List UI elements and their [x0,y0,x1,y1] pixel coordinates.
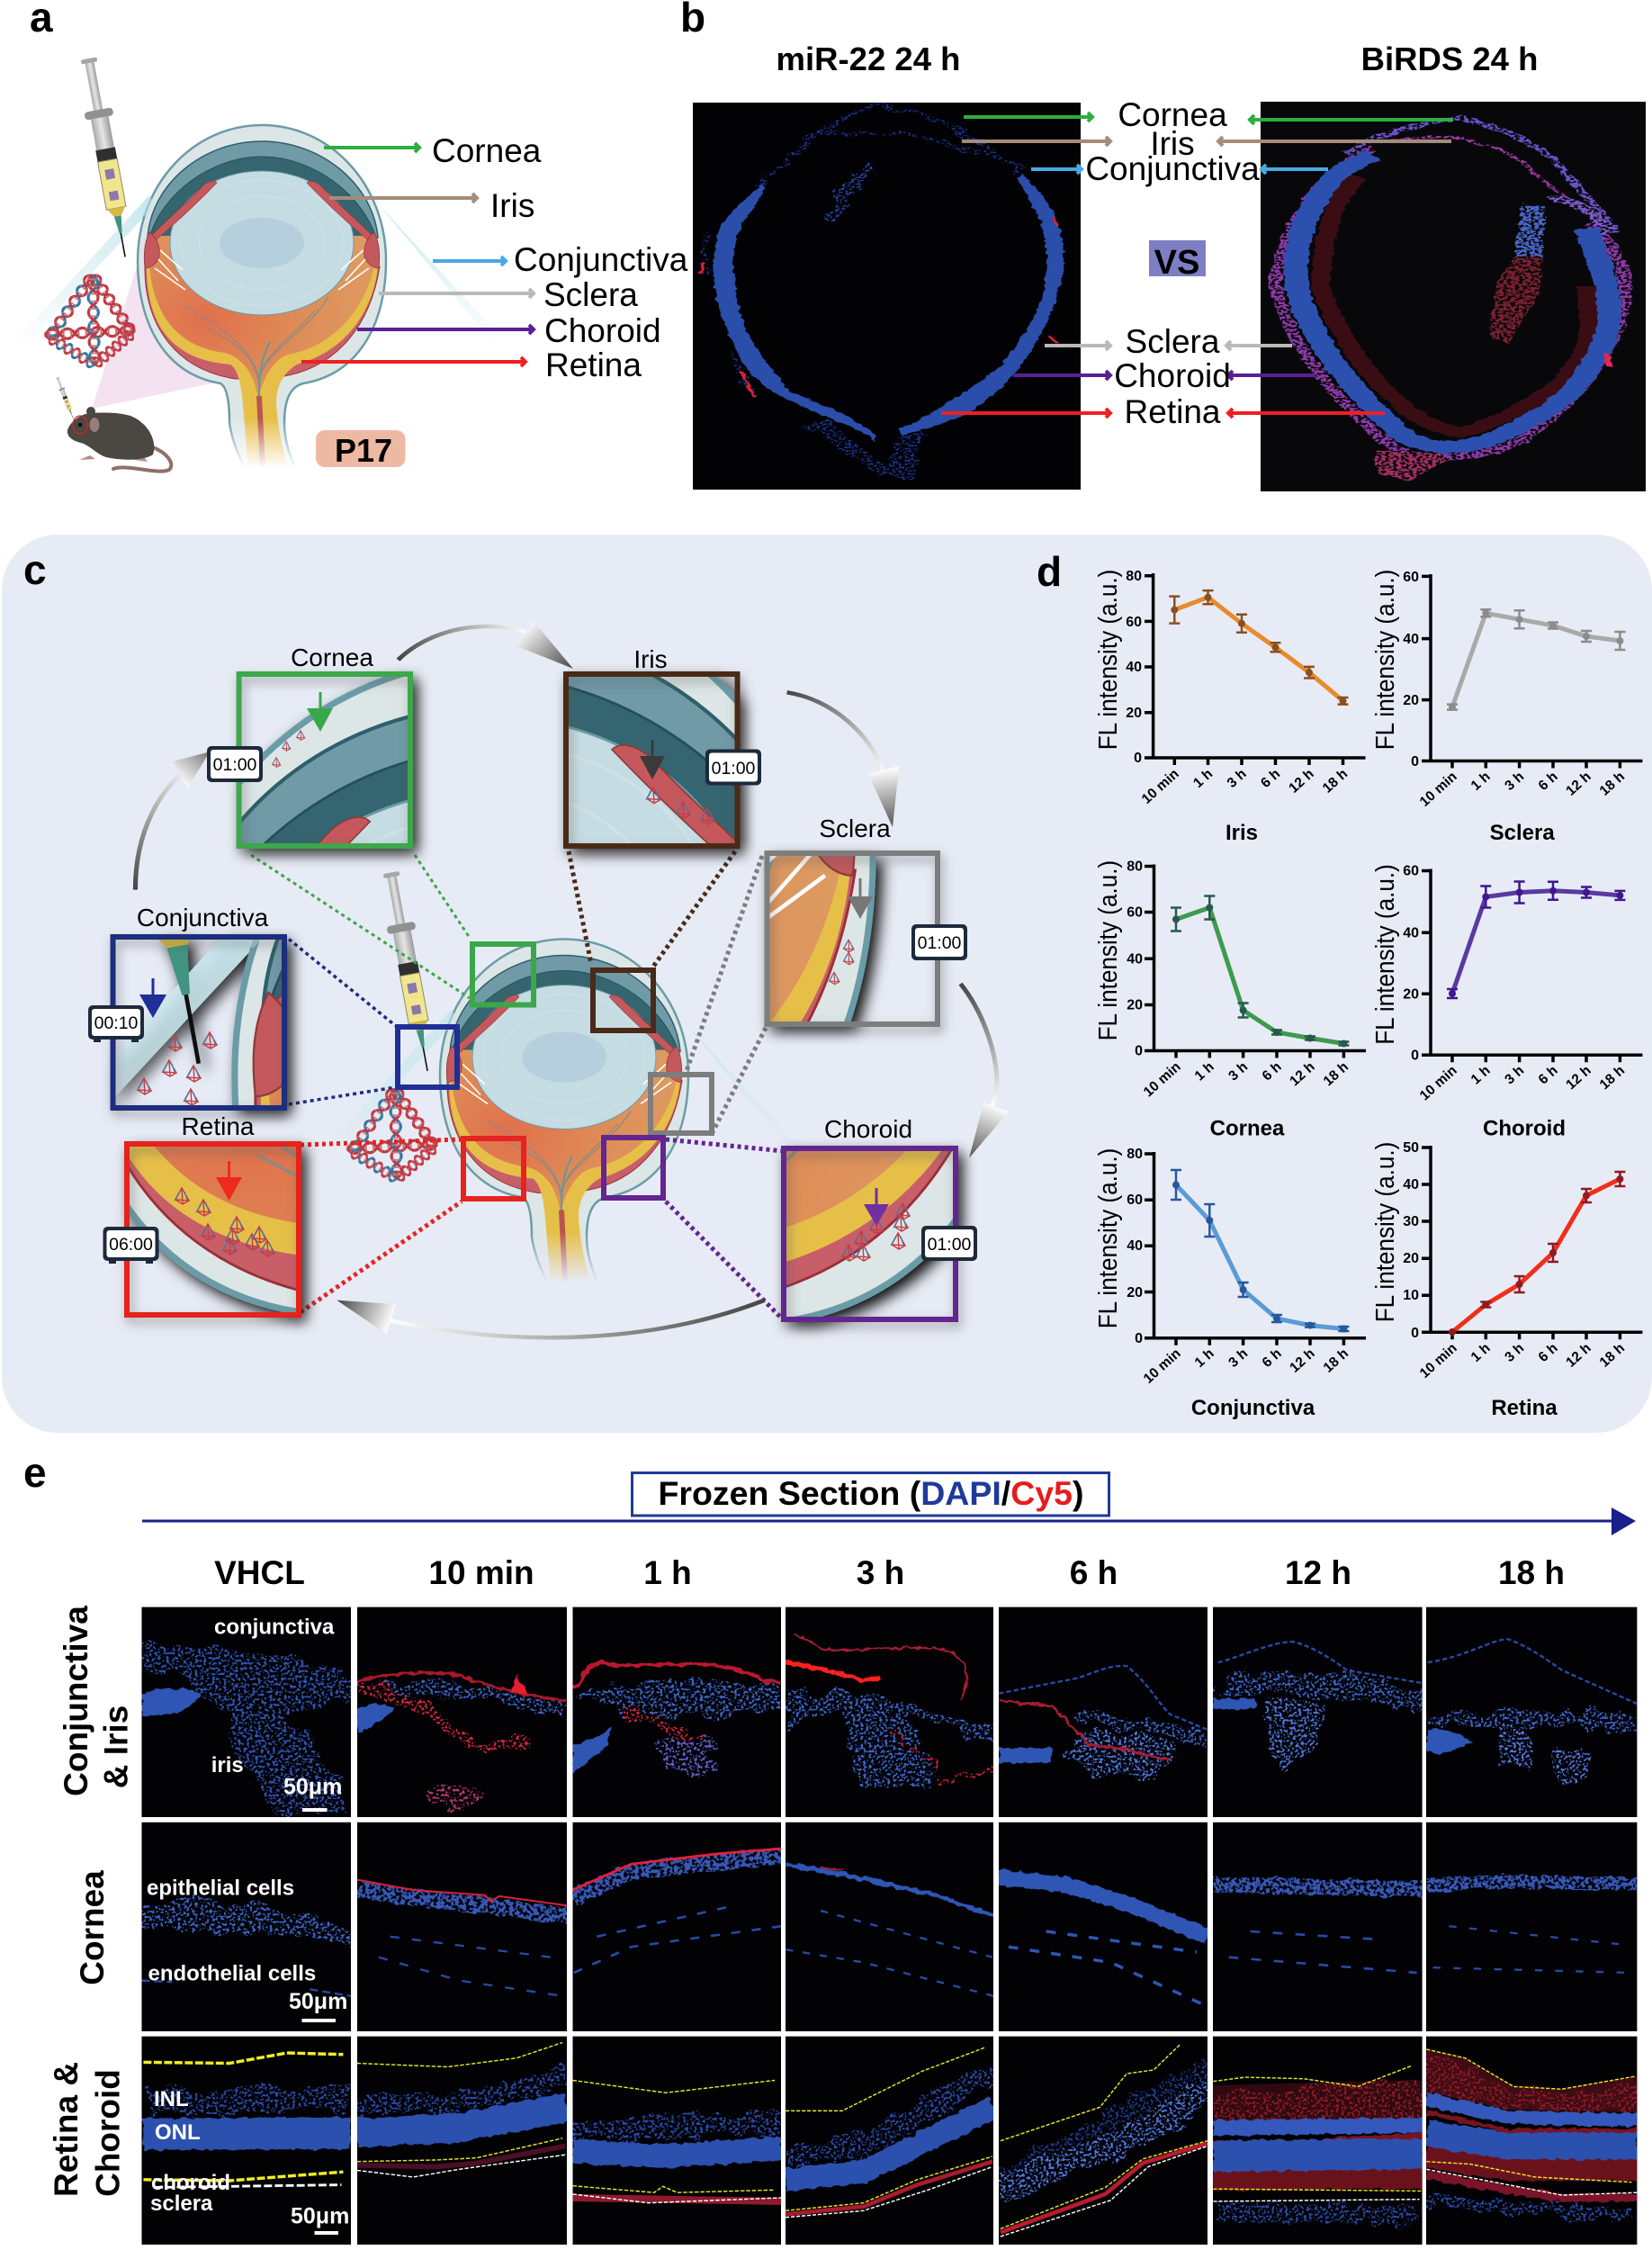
column headers: 1 h [643,1554,692,1591]
annotations row 1 [211,1615,342,1812]
chart: choroid: 12 h [1563,1063,1594,1093]
timeline arrow [142,1508,1636,1535]
chart: retina: Retina [1491,1396,1558,1420]
micrograph: cornea 3 h [786,1822,993,2032]
timer 06:00 retina [103,1227,158,1264]
inset: sclera: Sclera [819,814,891,842]
chart: conjunctiva: FL intensity (a.u.) [1093,1148,1122,1328]
chart: retina: 20 [1403,1251,1419,1266]
micrograph: miR-22 eye section [693,103,1082,490]
chart: retina [1370,1140,1642,1420]
inset: choroid: Choroid [824,1115,912,1143]
panel d: line charts [1037,548,1642,1420]
micrograph: cornea 10 min [357,1822,567,2032]
tissue labels between images: Retina [1125,393,1221,430]
micrograph: BiRDS eye section [1261,102,1646,491]
chart: iris: 80 [1126,569,1142,584]
chart: iris: 10 min [1139,766,1182,807]
chart: choroid: 0 [1411,1048,1419,1064]
chart: retina: 6 h [1536,1340,1561,1365]
chart: iris: 20 [1126,706,1142,721]
chart: conjunctiva: 40 [1127,1238,1143,1254]
micrograph: conjunctiva iris 3 h [786,1606,993,1818]
chart: iris: 3 h [1225,766,1250,791]
micrograph: retina choroid VHCL [141,2036,352,2245]
annotations row 3: 50μm [291,2204,349,2229]
timer 01:00 sclera [911,924,967,960]
column headers: 3 h [857,1554,904,1591]
chart: choroid: 40 [1403,925,1419,941]
VS badge: VS [1154,244,1199,282]
chart: retina: 30 [1403,1214,1419,1229]
micrograph: cornea 6 h [999,1822,1208,2032]
chart: iris: FL intensity (a.u.) [1093,570,1122,750]
annotations row 3: choroid [151,2171,230,2195]
column headers: VHCL [214,1554,305,1591]
inset: retina: Retina [182,1112,255,1140]
chart: conjunctiva: 60 [1127,1192,1143,1208]
timer 01:00 choroid: 01:00 [928,1235,972,1255]
micrograph: conjunctiva iris 1 h [572,1606,781,1818]
arrow: conjunctiva [433,256,506,266]
badge: P17 [316,430,405,469]
chart: retina: 40 [1403,1177,1419,1192]
tissue labels between images: Iris [1150,125,1195,162]
tissue labels between images: Sclera [1126,323,1220,360]
central eye with magnification squares [316,870,809,1282]
pink projection from mouse eye [92,264,220,409]
chart: conjunctiva: 20 [1127,1285,1143,1300]
magnification squares on eye [398,944,712,1199]
annotations row 1: conjunctiva [214,1615,335,1640]
column headers: 6 h [1070,1554,1118,1591]
chart: conjunctiva: 10 min [1141,1346,1184,1387]
chart: cornea [1093,859,1366,1141]
icon: mouse with injection [55,376,171,472]
tissue labels between images: Conjunctiva [1085,150,1260,187]
panel label c: c [23,546,47,593]
chart: conjunctiva: 18 h [1321,1346,1351,1376]
column headers: 18 h [1498,1554,1565,1591]
chart: choroid: 10 min [1417,1063,1460,1103]
inset: cornea: Cornea [291,644,373,671]
annotations row 2: 50μm [289,1989,347,2014]
chart: iris [1093,569,1366,845]
label: iris: Iris [490,187,534,224]
chart: cornea: 20 [1127,997,1143,1013]
chart: retina: 10 min [1417,1340,1460,1382]
comparison arrows for both images [941,112,1453,418]
chart: sclera: 3 h [1502,769,1527,794]
micrograph: retina choroid 3 h [786,2036,993,2245]
annotations row 2: endothelial cells [148,1962,316,1986]
chart: sclera: 60 [1403,570,1419,585]
chart: retina: FL intensity (a.u.) [1370,1142,1399,1322]
micrograph: cornea 18 h [1426,1822,1638,2032]
micrograph: retina choroid 12 h [1213,2036,1423,2245]
chart: choroid: Choroid [1483,1116,1566,1141]
chart: choroid: 3 h [1502,1063,1527,1087]
chart: cornea: 80 [1127,859,1143,875]
panel label d: d [1037,548,1062,595]
panel c: transport pathway [25,562,1609,1339]
chart: conjunctiva: 0 [1135,1331,1143,1346]
chart: retina: 1 h [1468,1340,1494,1365]
timer 06:00 retina: 06:00 [109,1235,153,1255]
dotted connector lines [251,851,784,1318]
chart: retina: 3 h [1502,1340,1527,1365]
chart: sclera: 0 [1411,754,1419,770]
annotations row 3: ONL [155,2120,201,2145]
label: conjunctiva: Conjunctiva [514,241,688,278]
chart: cornea: 60 [1127,905,1143,920]
chart: sclera: FL intensity (a.u.) [1370,570,1399,750]
micrograph: retina choroid 6 h [999,2036,1208,2245]
tissue labels between images: Cornea [1118,96,1227,133]
chart: iris: 18 h [1320,766,1351,796]
chart: cornea: 0 [1135,1044,1143,1058]
arrow: sclera [379,289,534,298]
inset: conjunctiva [105,908,303,1127]
chart: sclera [1370,570,1642,845]
label: choroid: Choroid [544,312,661,349]
chart: cornea: 6 h [1260,1059,1285,1084]
annotations row 1: iris [211,1753,244,1778]
annotations row 2 [147,1876,347,2022]
inset: iris [558,650,756,866]
micrograph: conjunctiva iris 6 h [999,1606,1208,1818]
circular flow arrows [135,621,1009,1337]
annotations row 1: 50μm [283,1775,342,1800]
arrow: choroid [357,325,534,334]
timer 01:00 iris: 01:00 [712,759,756,778]
chart: choroid: FL intensity (a.u.) [1370,864,1399,1045]
inset: choroid [776,1120,974,1339]
chart: sclera: 40 [1403,632,1419,647]
arrow: retina [301,357,525,366]
chart: cornea: 12 h [1287,1059,1318,1089]
chart: retina: 50 [1403,1140,1419,1156]
inset: iris: Iris [633,645,668,673]
title box: frozen section: Frozen Section (DAPI/Cy5) [659,1474,1083,1512]
panel a: eye anatomy schematic [13,0,688,472]
chart: cornea: 10 min [1141,1059,1184,1100]
panel label e: e [23,1449,47,1496]
timer 00:10 conjunctiva [88,1005,144,1042]
tissue labels between images [1085,96,1260,430]
chart: iris: 60 [1126,615,1142,630]
chart: conjunctiva: 3 h [1226,1346,1251,1371]
timer 01:00 cornea [207,746,263,782]
chart: choroid: 1 h [1468,1063,1494,1087]
timer 01:00 sclera: 01:00 [918,933,962,953]
timer 01:00 cornea: 01:00 [213,755,257,775]
chart: conjunctiva [1093,1147,1366,1420]
chart: cornea: 40 [1127,952,1143,967]
micrograph: cornea 12 h [1213,1822,1423,2032]
chart: choroid: 20 [1403,986,1419,1003]
chart: choroid: 60 [1403,864,1419,878]
annotations row 2: epithelial cells [147,1876,294,1901]
annotations row 3: sclera [150,2192,213,2216]
chart: sclera: 18 h [1597,769,1628,799]
inset: retina [119,1117,318,1333]
badge: P17: P17 [335,432,392,469]
timer 00:10 conjunctiva: 00:10 [94,1013,139,1033]
row headers: Conjunctiva [58,1606,94,1796]
chart: conjunctiva: 12 h [1287,1346,1318,1376]
row headers: Choroid [90,2069,127,2197]
micrograph: cornea 1 h [572,1822,781,2032]
micrograph: conjunctiva iris 10 min [357,1606,567,1818]
chart: sclera: 12 h [1563,769,1594,799]
tissue labels between images: Choroid [1114,357,1231,394]
chart: iris: 12 h [1286,766,1317,796]
heading: BiRDS 24 h: BiRDS 24 h [1361,40,1538,77]
eye cross-section with syringe and DNA tetrahedron [13,56,507,468]
chart: conjunctiva: Conjunctiva [1191,1396,1315,1420]
chart: sclera: 10 min [1417,769,1460,810]
chart: sclera: 20 [1403,693,1419,708]
chart: cornea: 1 h [1192,1059,1217,1084]
chart: sclera: 6 h [1536,769,1561,794]
column headers: 10 min [428,1554,534,1591]
column headers: 12 h [1285,1554,1351,1591]
annotations row 3: INL [154,2087,189,2111]
arrow: iris [329,194,477,202]
inset: conjunctiva: Conjunctiva [137,904,269,932]
chart: retina: 12 h [1563,1340,1594,1371]
row headers [48,1606,135,2197]
chart: iris: Iris [1226,821,1258,845]
chart: choroid [1370,864,1642,1141]
annotations row 3 [150,2087,349,2235]
chart: choroid: 6 h [1536,1063,1561,1087]
chart: choroid: 18 h [1597,1063,1628,1093]
row headers: Retina & [48,2062,85,2197]
chart: retina: 0 [1411,1326,1419,1341]
chart: sclera: Sclera [1490,821,1555,845]
panel e: frozen section time course [23,1449,1638,2245]
chart: cornea: 18 h [1321,1059,1351,1089]
micrograph: conjunctiva iris 12 h [1213,1606,1423,1818]
timer 01:00 iris [705,749,761,785]
chart: iris: 1 h [1190,766,1216,791]
chart: conjunctiva: 1 h [1192,1346,1217,1371]
micrograph: conjunctiva iris 18 h [1426,1606,1638,1818]
chart: cornea: FL intensity (a.u.) [1093,860,1122,1040]
chart: cornea: Cornea [1210,1116,1285,1141]
panel b: fluorescence comparison [680,0,1646,491]
chart: iris: 6 h [1258,766,1283,791]
background panel for c and d [2,535,1652,1433]
chart: retina: 10 [1403,1288,1419,1303]
micrograph: retina choroid 18 h [1426,2036,1638,2245]
micrograph: retina choroid 1 h [572,2036,781,2245]
chart: conjunctiva: 80 [1127,1147,1143,1162]
label: cornea: Cornea [432,132,542,169]
micrograph: retina choroid 10 min [357,2036,567,2245]
label: sclera: Sclera [543,276,638,313]
heading: miR-22 24 h: miR-22 24 h [777,40,960,77]
row headers: Cornea [74,1870,111,1985]
inset: sclera [759,819,950,1044]
chart: sclera: 1 h [1468,769,1494,794]
micrograph: conjunctiva iris VHCL [141,1606,352,1818]
label: retina: Retina [545,346,642,383]
chart: cornea: 3 h [1226,1059,1251,1084]
timer 01:00 choroid [921,1226,977,1261]
chart: retina: 18 h [1597,1340,1628,1371]
column headers [214,1554,1565,1591]
micrograph: cornea VHCL [141,1822,352,2032]
chart: conjunctiva: 6 h [1260,1346,1285,1371]
row headers: & Iris [98,1706,135,1788]
arrow: cornea [324,143,419,152]
chart: iris: 40 [1126,660,1142,675]
inset: cornea [230,648,429,866]
chart: iris: 0 [1134,751,1142,766]
